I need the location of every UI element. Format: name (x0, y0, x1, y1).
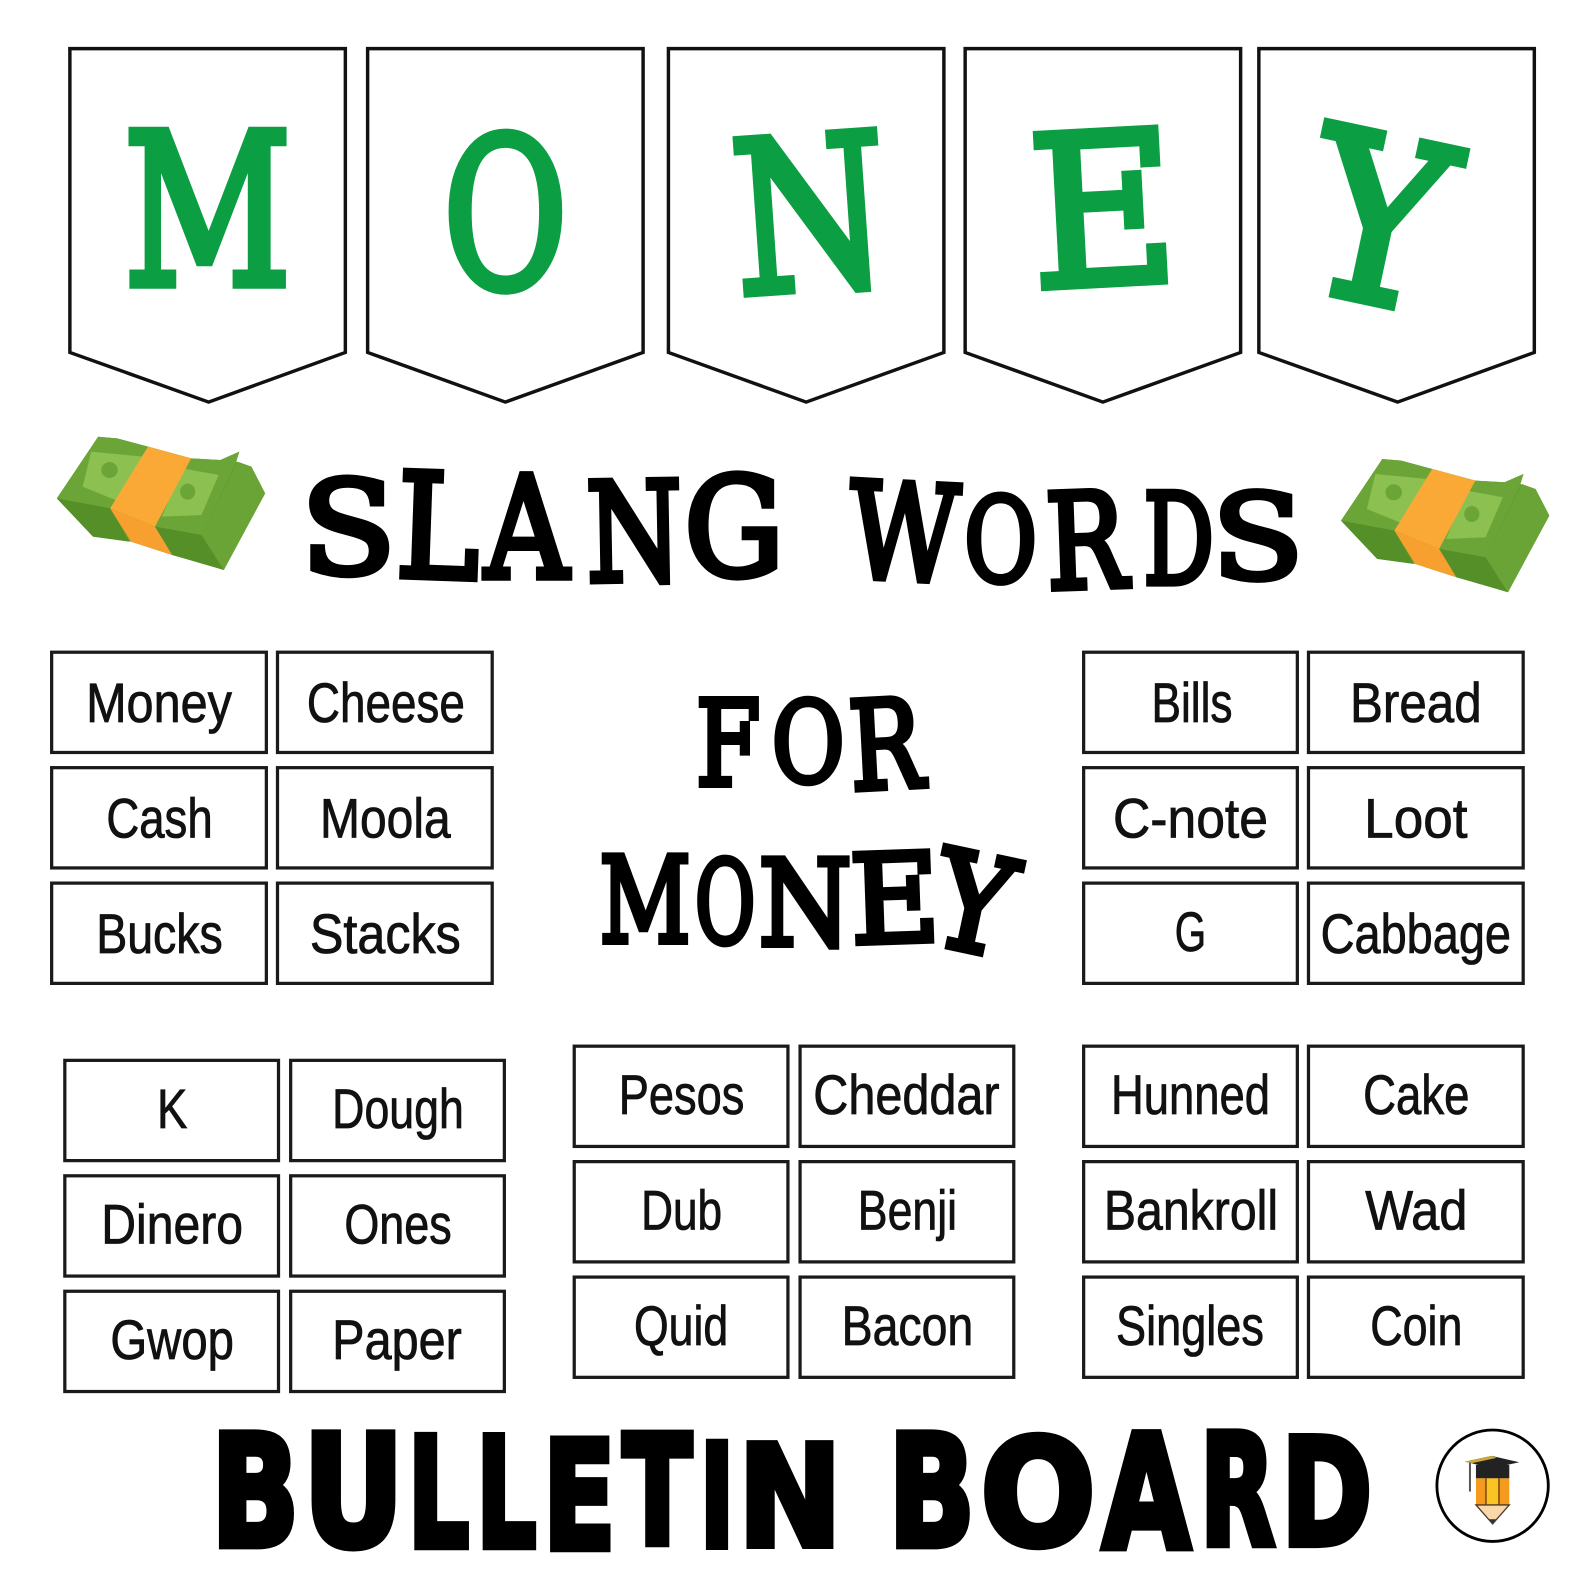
card: Cake (1308, 1046, 1523, 1146)
pennant Y: Y (1281, 79, 1475, 368)
card: Cheddar (800, 1046, 1014, 1146)
card: Dough: Dough (332, 1078, 464, 1140)
heading: BULLETIN BOARD: R (1200, 1403, 1275, 1582)
card: Money (52, 652, 266, 752)
heading: FOR: R (846, 673, 929, 820)
card: C-note: C-note (1113, 788, 1268, 850)
card: Bread: Bread (1350, 672, 1482, 734)
card: Hunned: Hunned (1111, 1064, 1270, 1126)
card: Coin (1308, 1277, 1523, 1377)
icon: left money stack (57, 437, 265, 570)
heading: MONEY (599, 820, 1030, 990)
heading: SLANG WORDS: S (1212, 469, 1304, 606)
card: Benji (800, 1162, 1014, 1262)
pennant O: O (443, 96, 568, 338)
card: Singles (1084, 1277, 1297, 1377)
card: Money: Money (86, 672, 232, 734)
card: Quid: Quid (634, 1295, 728, 1357)
card: Cake: Cake (1363, 1064, 1470, 1126)
heading: MONEY: N (759, 835, 852, 973)
card: Cabbage: Cabbage (1321, 903, 1511, 965)
card: Ones: Ones (344, 1194, 452, 1256)
card: Bills: Bills (1152, 672, 1233, 734)
heading: BULLETIN BOARD: E (543, 1409, 616, 1584)
card: G: G (1175, 901, 1206, 963)
card: Moola: Moola (320, 788, 451, 850)
heading: SLANG WORDS: A (484, 448, 570, 611)
card: Benji: Benji (858, 1179, 957, 1241)
banner: MONEY pennants (70, 49, 1534, 402)
card: Cheddar: Cheddar (813, 1064, 1000, 1126)
card: C-note (1084, 768, 1297, 868)
pennant E (965, 49, 1241, 402)
card: Bacon: Bacon (842, 1295, 973, 1357)
card: Dub: Dub (641, 1179, 722, 1241)
heading: MONEY: M (599, 832, 691, 970)
card: Gwop (65, 1291, 279, 1392)
heading: FOR (696, 673, 929, 820)
heading: SLANG WORDS: S (301, 454, 396, 604)
card: Cheese: Cheese (307, 672, 465, 734)
card: Quid (574, 1277, 788, 1377)
icon: pencil graduate logo (1437, 1430, 1548, 1541)
heading: BULLETIN BOARD: U (303, 1402, 404, 1582)
heading: BULLETIN BOARD: N (738, 1417, 842, 1579)
heading: BULLETIN BOARD: I (700, 1415, 734, 1581)
word cards: bottom right (1084, 1046, 1523, 1377)
card: Paper (291, 1291, 504, 1392)
heading: MONEY: Y (918, 820, 1030, 990)
card: Bucks (52, 883, 266, 983)
card: Cash: Cash (106, 788, 213, 850)
heading: SLANG WORDS: O (964, 472, 1037, 609)
word cards: bottom left (65, 1060, 504, 1392)
heading: SLANG WORDS: L (394, 443, 482, 613)
card: Hunned (1084, 1046, 1297, 1146)
card: Bankroll (1084, 1162, 1297, 1262)
card: K (65, 1060, 279, 1161)
card: Pesos (574, 1046, 788, 1146)
heading: SLANG WORDS: R (1043, 465, 1131, 621)
card: Gwop: Gwop (110, 1309, 234, 1371)
heading: BULLETIN BOARD: L (408, 1405, 469, 1582)
card: Stacks (277, 883, 492, 983)
pennant N (668, 49, 944, 402)
card: Moola (277, 768, 492, 868)
card: Ones (291, 1176, 504, 1276)
heading: MONEY: O (695, 836, 755, 970)
heading: SLANG WORDS: G (684, 449, 784, 608)
heading: BULLETIN BOARD: T (623, 1405, 692, 1580)
heading: SLANG WORDS (301, 443, 1304, 621)
card: Bread (1308, 652, 1523, 752)
card: Bills (1084, 652, 1297, 752)
heading: BULLETIN BOARD: B (211, 1404, 299, 1583)
card: Bacon (800, 1277, 1014, 1377)
heading: SLANG WORDS: W (845, 454, 963, 614)
card: Loot (1308, 768, 1523, 868)
card: G (1084, 883, 1297, 983)
pennant E: E (1024, 87, 1183, 337)
heading: BULLETIN BOARD: D (1281, 1407, 1372, 1580)
card: Dinero: Dinero (101, 1194, 243, 1256)
card: Cash (52, 768, 266, 868)
card: Stacks: Stacks (310, 903, 461, 965)
pennant O (368, 49, 643, 402)
card: Bucks: Bucks (96, 903, 223, 965)
heading: BULLETIN BOARD: L (476, 1406, 536, 1583)
heading: SLANG WORDS: D (1144, 466, 1214, 613)
heading: BULLETIN BOARD: B (889, 1403, 975, 1582)
card: Cabbage (1308, 883, 1523, 983)
card: Paper: Paper (332, 1309, 462, 1371)
icon: right money stack (1341, 459, 1549, 592)
card: K: K (157, 1078, 187, 1140)
heading: BULLETIN BOARD: O (981, 1409, 1095, 1580)
card: Coin: Coin (1370, 1295, 1462, 1357)
card: Pesos: Pesos (619, 1064, 744, 1126)
card: Singles: Singles (1116, 1295, 1264, 1357)
card: Wad: Wad (1365, 1179, 1467, 1241)
heading: FOR: O (772, 678, 845, 808)
card: Loot: Loot (1364, 788, 1468, 850)
card: Cheese (277, 652, 492, 752)
pennant M: M (124, 89, 292, 335)
word cards: top right (1084, 652, 1523, 983)
heading: BULLETIN BOARD (211, 1402, 1372, 1585)
card: Wad (1308, 1162, 1523, 1262)
word cards: bottom middle (574, 1046, 1014, 1377)
pennant M (70, 49, 345, 402)
card: Dinero (65, 1176, 279, 1276)
card: Dub (574, 1162, 788, 1262)
heading: SLANG WORDS: N (585, 454, 683, 614)
heading: MONEY: E (848, 826, 942, 972)
card: Dough (291, 1060, 504, 1161)
card: Bankroll: Bankroll (1104, 1179, 1278, 1241)
heading: FOR: F (696, 676, 760, 814)
heading: BULLETIN BOARD: A (1103, 1403, 1190, 1585)
pennant Y (1259, 49, 1534, 402)
pennant N: N (725, 88, 896, 344)
word cards: top left (52, 652, 492, 983)
